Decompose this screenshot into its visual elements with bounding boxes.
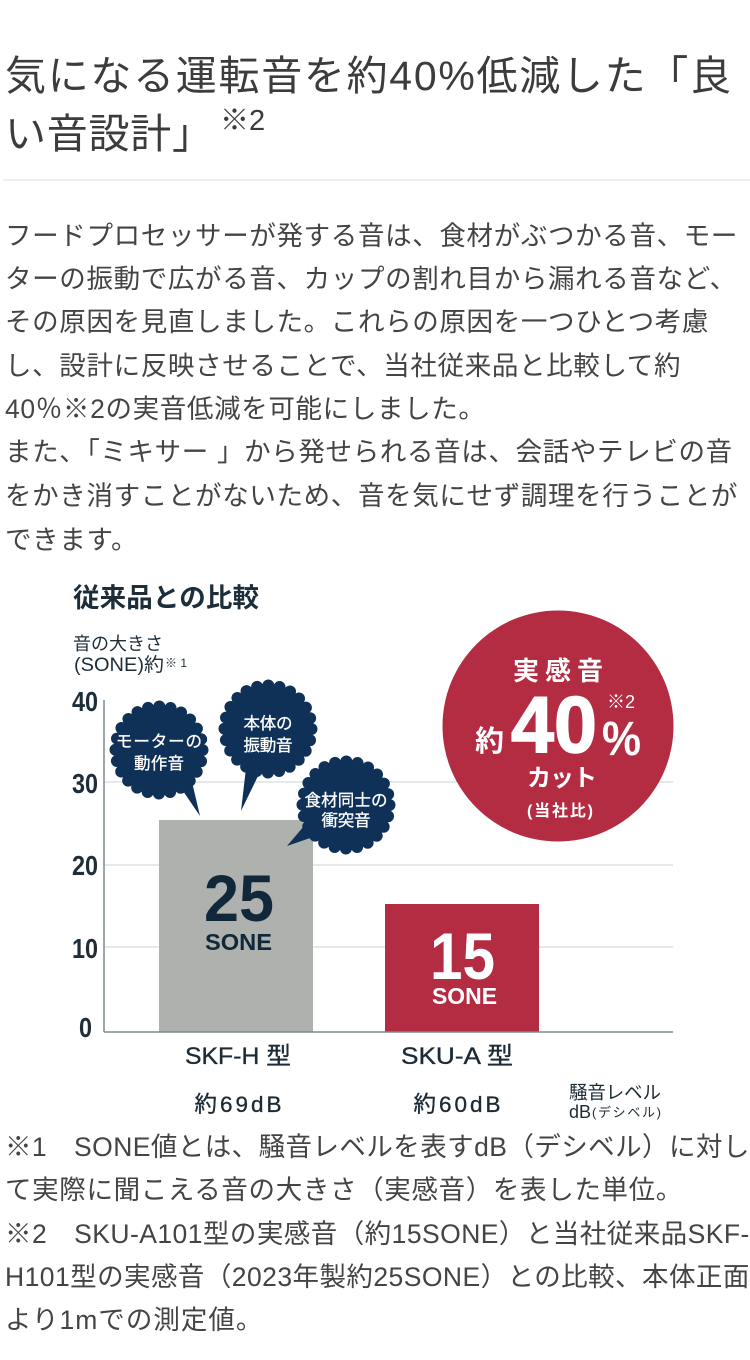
text block: body description: ターの振動で広がる音、カップの割れ目から漏れる音など、 [5, 264, 737, 294]
footnotes: ※2 SKU-A101型の実感音（約15SONE）と当社従来品SKF- [5, 1219, 750, 1249]
callout: about 40% cut: 40 [511, 680, 597, 769]
category and decibel labels [185, 1043, 661, 1122]
speech bubble: food collision sound: 衝突音 [322, 811, 370, 830]
bar: SKU-A 15 SONE: SONE [432, 983, 497, 1009]
y axis labels: 40 [72, 686, 98, 717]
speech bubble: body vibration sound [223, 684, 313, 811]
title: い音設計」 [5, 111, 213, 157]
speech bubble: motor sound: モーターの [116, 732, 202, 751]
callout: about 40% cut: カット [527, 765, 597, 792]
y axis labels [72, 686, 98, 1043]
y axis labels: 0 [79, 1012, 92, 1043]
chart heading: 従来品との比較 [73, 583, 260, 613]
footnotes: より1mでの測定値。 [5, 1305, 263, 1335]
category and decibel labels: SKF-H 型 [185, 1043, 291, 1070]
speech bubble: body vibration sound: 振動音 [244, 736, 292, 755]
footnotes: て実際に聞こえる音の大きさ（実感音）を表した単位。 [5, 1175, 683, 1205]
speech bubble: motor sound [114, 705, 204, 816]
bar: SKF-H 25 SONE [159, 820, 313, 1032]
title [5, 53, 731, 157]
y axis title [73, 634, 187, 676]
callout: about 40% cut: 約 [475, 725, 504, 758]
text block: body description: その原因を見直しました。これらの原因を一つひとつ考慮 [5, 307, 709, 337]
bar: SKU-A 15 SONE [385, 904, 539, 1032]
text block: body description: をかき消すことがないため、音を気にせず調理を行うことが [5, 481, 738, 511]
speech bubble: food collision sound [287, 760, 391, 850]
callout: about 40% cut: ※2 [607, 692, 635, 712]
speech bubble: food collision sound: 食材同士の [304, 791, 388, 810]
y axis labels: 30 [72, 768, 98, 799]
callout: about 40% cut: % [602, 713, 641, 766]
footnotes [5, 1132, 750, 1335]
speech bubble: body vibration sound: 本体の [244, 714, 292, 733]
category and decibel labels: 約69dB [194, 1092, 282, 1117]
text block: body description: 40％※2の実音低減を可能にしました。 [5, 394, 486, 424]
callout: about 40% cut: (当社比) [527, 802, 593, 820]
text block: body description: できます。 [5, 525, 138, 555]
y axis title: 音の大きさ [73, 634, 163, 654]
y axis title: (SONE)約 [74, 654, 164, 676]
text block: body description: し、設計に反映させることで、当社従来品と比較して約 [5, 351, 681, 381]
title: ※2 [220, 105, 265, 137]
category and decibel labels: 騒音レベル [569, 1082, 661, 1103]
y axis labels: 20 [72, 850, 98, 881]
category and decibel labels: SKU-A 型 [401, 1043, 513, 1070]
callout: about 40% cut [442, 610, 674, 842]
chart: comparison with previous model [72, 583, 674, 1122]
category and decibel labels: dB [569, 1102, 591, 1122]
y axis labels: 10 [72, 933, 98, 964]
text block: body description: また、「ミキサー 」から発せられる音は、会話やテレビの音 [5, 437, 733, 467]
title: 気になる運転音を約40%低減した「良 [5, 53, 731, 99]
y axis title: ※ 1 [165, 656, 187, 670]
text block: body description: フードプロセッサーが発する音は、食材がぶつかる音、モー [5, 221, 738, 251]
footnotes: H101型の実感音（2023年製約25SONE）との比較、本体正面 [5, 1262, 750, 1292]
footnotes: ※1 SONE値とは、騒音レベルを表すdB（デシベル）に対し [5, 1132, 750, 1162]
bar: SKF-H 25 SONE: SONE [205, 929, 272, 955]
bar: SKU-A 15 SONE: 15 [430, 919, 495, 993]
text block: body description [5, 221, 738, 555]
bar: SKF-H 25 SONE: 25 [204, 861, 274, 935]
speech bubble: motor sound: 動作音 [134, 754, 184, 773]
callout: about 40% cut: 実感音 [513, 656, 603, 686]
category and decibel labels: 約60dB [414, 1092, 500, 1117]
category and decibel labels: (デシベル) [592, 1105, 661, 1120]
